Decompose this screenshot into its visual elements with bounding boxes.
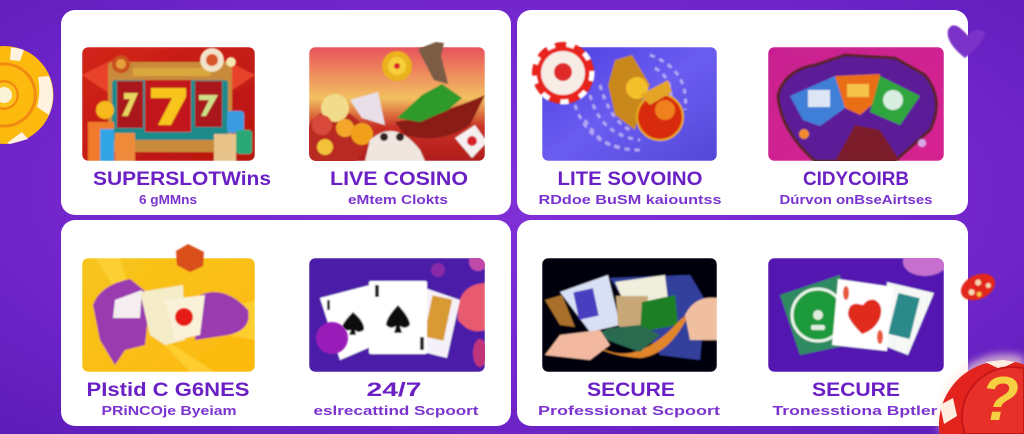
title: 24/7 <box>366 380 422 401</box>
image: three shields <box>768 47 944 161</box>
image: golden genie <box>542 47 717 161</box>
icon: purple ball <box>316 322 348 354</box>
image: green and heart cards <box>768 248 947 372</box>
panel: top right <box>517 10 985 215</box>
title: CIDYCOIRB <box>803 169 909 190</box>
subtitle: RDdoe BuSM kaiountss <box>538 192 722 207</box>
icon: red question chip <box>939 354 1024 434</box>
title: LITE SOVOINO <box>558 169 702 190</box>
title: SECURE <box>812 380 900 401</box>
icon: orange die <box>176 244 204 272</box>
image: playing cards <box>309 253 487 372</box>
subtitle: Tronesstiona Bptler <box>772 403 938 418</box>
title: SUPERSLOTWins <box>93 169 271 190</box>
icon: coin on slot machine <box>112 48 236 73</box>
image: slot machine <box>82 47 255 161</box>
image: tiles on yellow <box>82 258 255 372</box>
panel: bottom left <box>61 220 511 426</box>
question mark: ? <box>981 365 1019 434</box>
title: PIstid C G6NES <box>86 380 250 401</box>
icon: gold coin <box>382 51 412 81</box>
subtitle: PRiNCOje Byeiam <box>102 403 236 418</box>
subtitle: 6 gMMns <box>139 192 197 207</box>
subtitle: eslrecattind Scpoort <box>314 403 479 418</box>
icon: purple heart <box>948 25 985 58</box>
title: SECURE <box>587 380 675 401</box>
image: live casino <box>309 47 485 161</box>
panel: bottom right <box>517 220 968 426</box>
panel: top left <box>61 10 511 215</box>
subtitle: eMtem Clokts <box>348 192 448 207</box>
subtitle: Dúrvon onBseAirtses <box>780 192 932 207</box>
icon: small red chip <box>957 269 999 305</box>
icon: yellow poker chip <box>0 46 53 144</box>
image: hands with cards <box>542 258 717 372</box>
subtitle: Professionat Scpoort <box>538 403 721 418</box>
title: LIVE COSINO <box>330 169 468 190</box>
icon: red poker chip <box>532 42 594 104</box>
icon: bird over bowl <box>418 42 448 84</box>
